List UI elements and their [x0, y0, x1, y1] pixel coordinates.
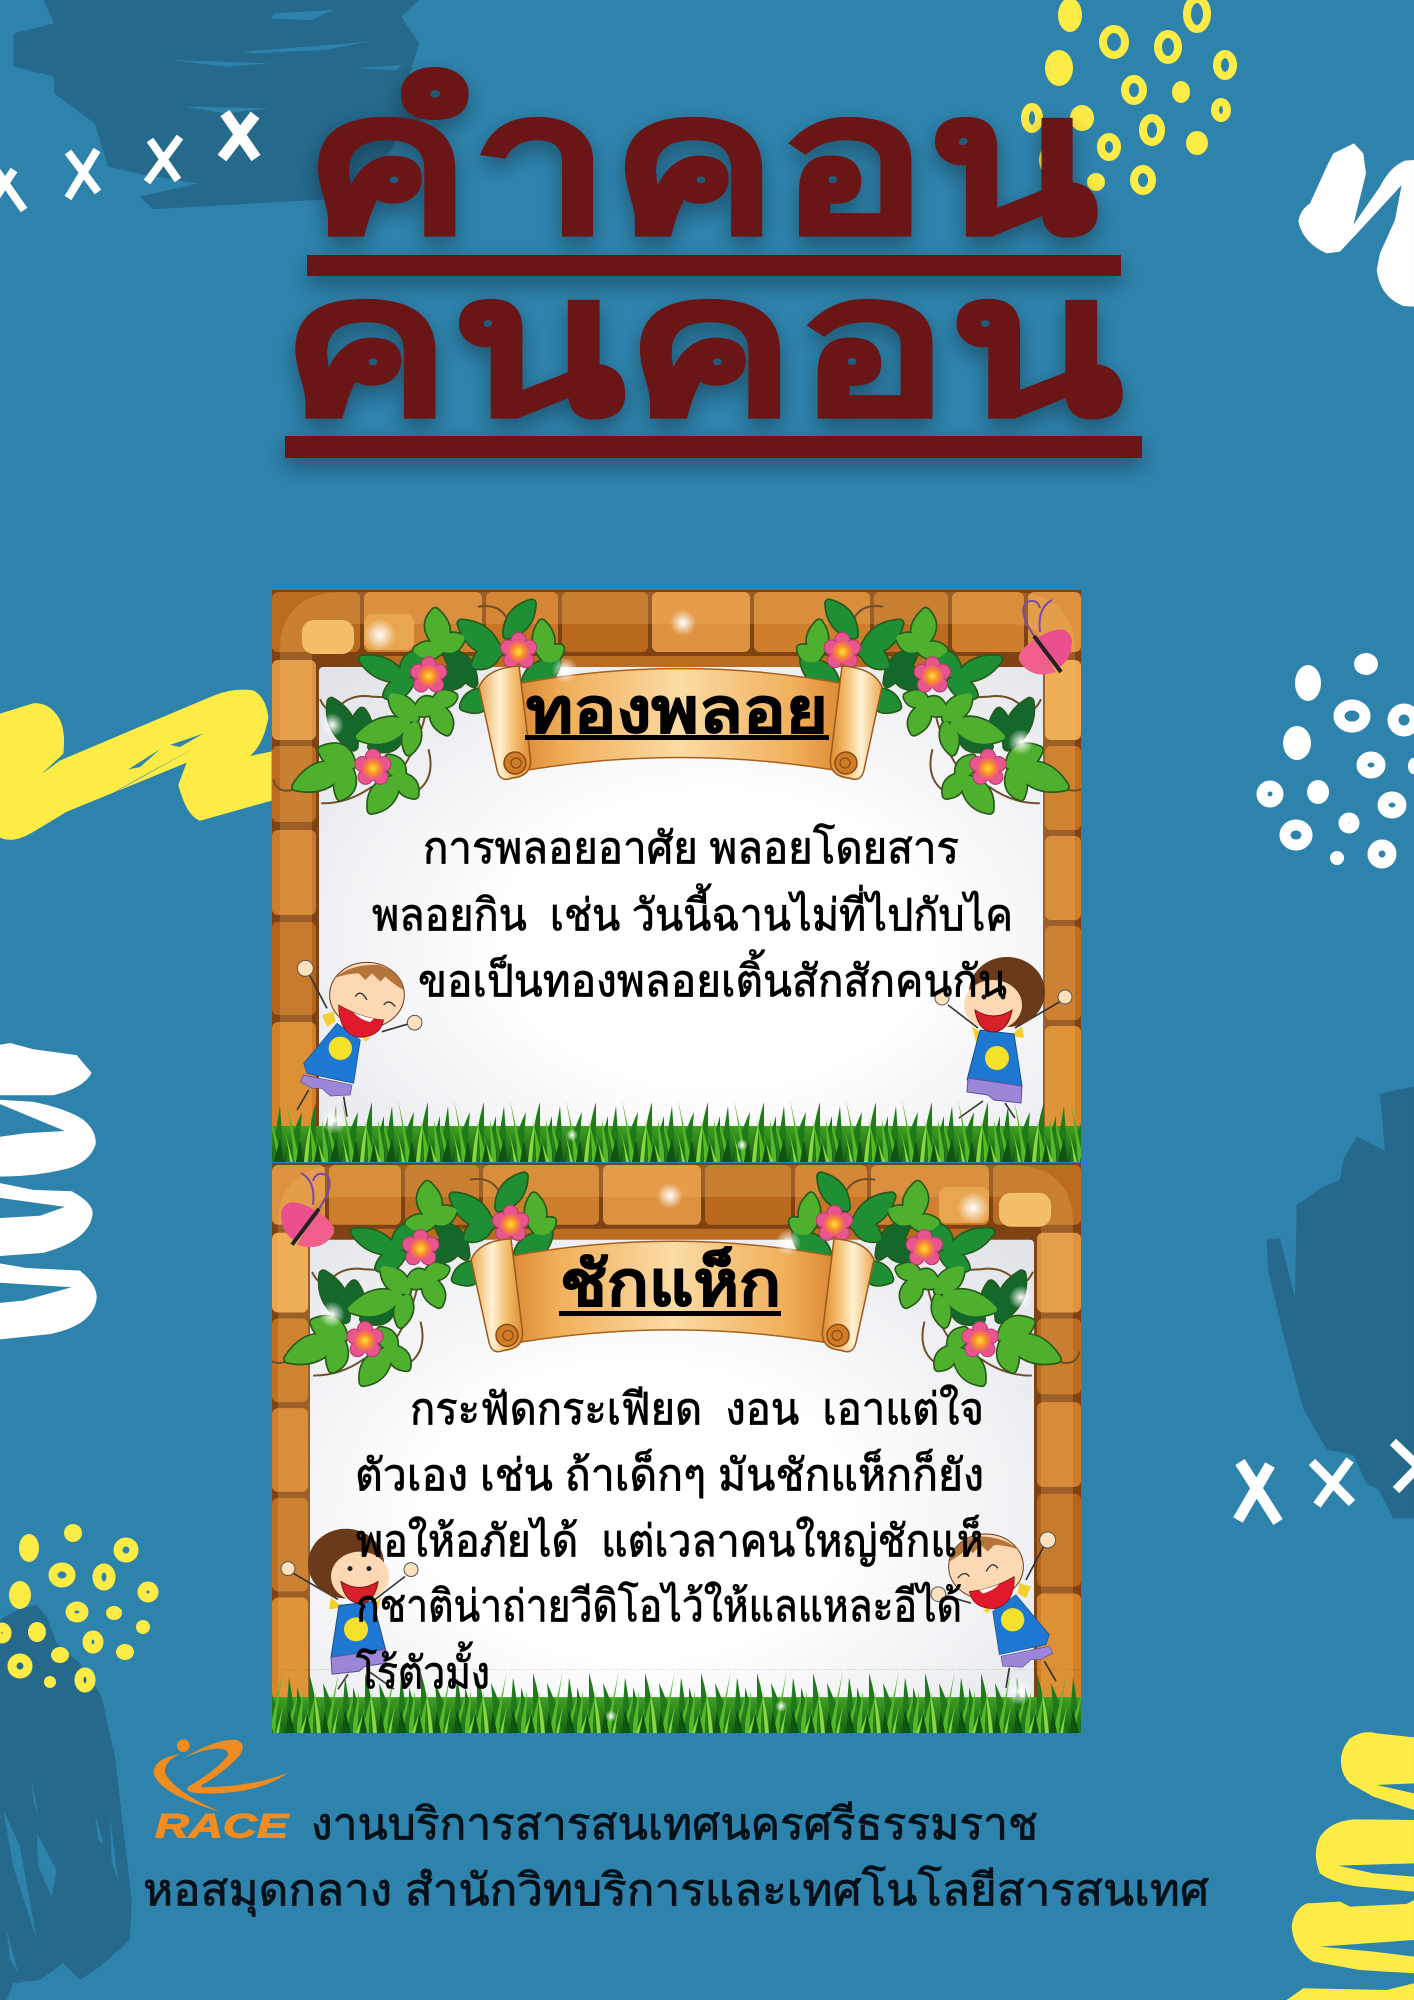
panel body text	[355, 1384, 984, 1698]
panel artwork	[266, 1163, 1081, 1733]
dots: yellow top right	[1025, 0, 1233, 191]
brush: dark right	[1267, 1087, 1414, 1518]
panel: ทองพลอย	[272, 590, 1087, 1162]
panel body text: การพลอยอาศัย พลอยโดยสาร	[423, 823, 959, 873]
title	[281, 54, 1142, 458]
crosses: white right	[1238, 1442, 1414, 1522]
footer text: งานบริการสารสนเทศนครศรีธรรมราช	[311, 1800, 1038, 1849]
title line one: คำคอน	[304, 54, 1098, 274]
brush: white left squiggle	[0, 1043, 97, 1339]
footer text: หอสมุดกลาง สำนักวิทบริการและเทศโนโลยีสารสนเทศ	[143, 1865, 1209, 1917]
logo: RACE	[153, 1739, 290, 1845]
panel body text: ตัวเอง เช่น ถ้าเด็กๆ มันชักแห็กก็ยัง	[355, 1449, 984, 1500]
brush: yellow bottom right	[1287, 1732, 1414, 2000]
title underline two	[285, 436, 1142, 458]
panel body text: โร้ตัวมั้ง	[356, 1641, 490, 1698]
footer text	[143, 1800, 1209, 1917]
title line two: คนคอน	[281, 236, 1123, 456]
brush: dark bottom left	[0, 1605, 132, 2000]
panel heading: ทองพลอย	[526, 678, 828, 746]
panel: ชักแห็ก	[266, 1163, 1081, 1733]
panel body text: กระฟัดกระเฟียด งอน เอาแต่ใจ	[410, 1384, 984, 1434]
dots: yellow bottom left	[0, 1524, 154, 1688]
panel artwork	[272, 590, 1087, 1162]
panel body text: พลอยกิน เช่น วันนี้ฉานไม่ที่ไปกับไค	[372, 883, 1013, 940]
panel body text: พอให้อภัยได้ แต่เวลาคนใหญ่ชักแห็	[356, 1515, 984, 1566]
panel body text	[372, 823, 1013, 1006]
brush: dark top left	[14, 0, 424, 209]
panel heading: ชักแห็ก	[560, 1246, 781, 1319]
title underline one	[307, 255, 1121, 276]
brush: white top right	[1298, 143, 1414, 307]
dots: white right	[1262, 653, 1414, 865]
panel body text: ขอเป็นทองพลอยเติ้นสักสักคนกัน	[418, 949, 1007, 1006]
panel body text: กชาติน่าถ่ายวีดิโอไว้ให้แลแหละอีได้	[356, 1581, 962, 1631]
crosses: white top left	[0, 113, 256, 210]
brush: yellow left	[0, 690, 272, 840]
logo: RACE: RACE	[155, 1807, 290, 1845]
